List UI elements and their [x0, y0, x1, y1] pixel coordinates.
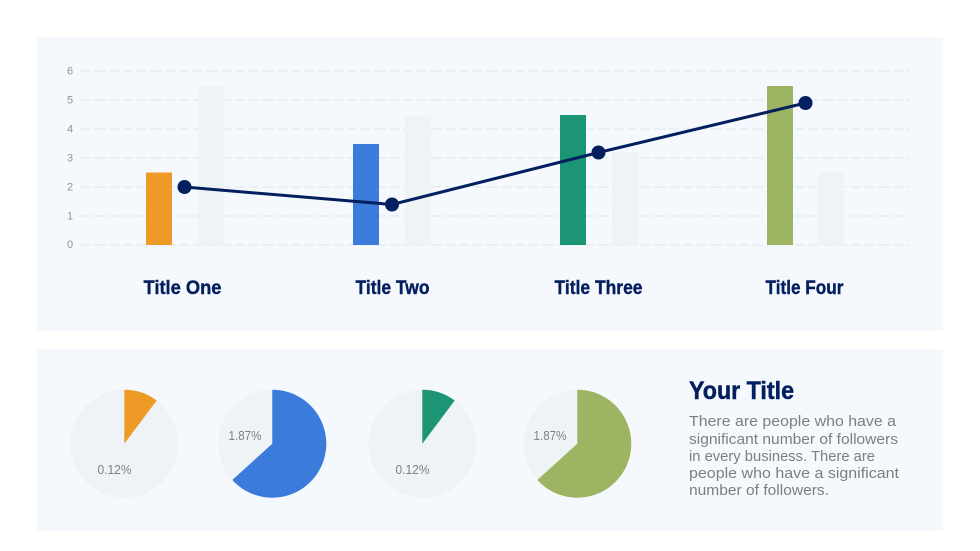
category labels: Title Four: [766, 278, 844, 299]
pie: orange: [70, 390, 178, 498]
y axis labels: 3: [67, 152, 73, 164]
pie: blue: 1.87%: [228, 429, 262, 443]
y axis labels: 2: [67, 182, 73, 194]
bars: Title Three: [560, 115, 638, 245]
category labels: [144, 278, 844, 299]
body text: people who have a significant: [689, 466, 899, 482]
line series: [178, 96, 812, 212]
category labels: Title Two: [356, 278, 430, 299]
pie: olive: [523, 390, 631, 498]
panel: pies and text: [37, 349, 943, 531]
pie: olive: 1.87%: [534, 429, 566, 443]
category labels: Title One: [144, 278, 222, 299]
bars: Title Two: [353, 115, 431, 245]
body text: number of followers.: [689, 483, 829, 499]
heading: Your Title: Your Title: [689, 377, 794, 405]
pie: blue: [218, 390, 326, 498]
panel: combo chart: [37, 37, 943, 331]
body text: [689, 414, 899, 499]
y axis labels: 4: [67, 124, 73, 136]
pie: green: [368, 390, 476, 498]
y axis labels: 6: [67, 66, 73, 78]
body text: significant number of followers: [689, 432, 898, 448]
category labels: Title Three: [554, 278, 642, 299]
y axis labels: [67, 66, 73, 251]
bars: Title Four: [767, 86, 844, 245]
pie: green: 0.12%: [396, 463, 430, 477]
y axis labels: 0: [67, 239, 73, 251]
body text: There are people who have a: [689, 414, 897, 430]
y axis labels: 1: [67, 210, 73, 222]
body text: in every business. There are: [689, 449, 875, 465]
pie: orange: 0.12%: [98, 463, 132, 477]
y axis labels: 5: [67, 94, 73, 106]
bars: Title One: [146, 86, 224, 245]
